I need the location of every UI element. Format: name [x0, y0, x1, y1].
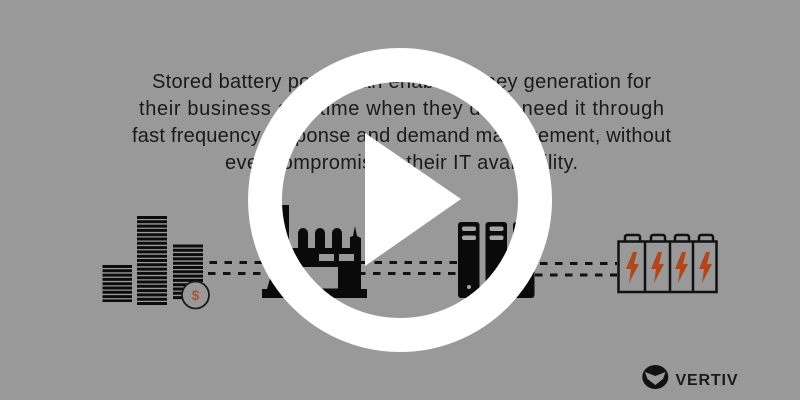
text block: description: Stored battery power can enable money generation for: [152, 71, 651, 93]
logo: Vertiv: [642, 365, 738, 389]
text block: description: [132, 71, 671, 174]
text block: description: fast frequency response and demand management, without: [132, 125, 671, 147]
logo: Vertiv: VERTIV: [676, 372, 738, 389]
dashed connection lines: [208, 262, 617, 275]
icon: factory: [262, 205, 367, 298]
text block: description: their business at a time when they don't need it through: [139, 98, 664, 120]
text block: description: ever compromising their IT availability.: [225, 152, 578, 174]
play button: [265, 65, 535, 335]
icon: server racks: [458, 222, 534, 298]
icon: dollar coin: [182, 282, 209, 308]
icon: batteries: [618, 235, 716, 292]
icon: dollar coin: $: [192, 287, 200, 303]
icon: stacks of coins: [117, 216, 188, 306]
